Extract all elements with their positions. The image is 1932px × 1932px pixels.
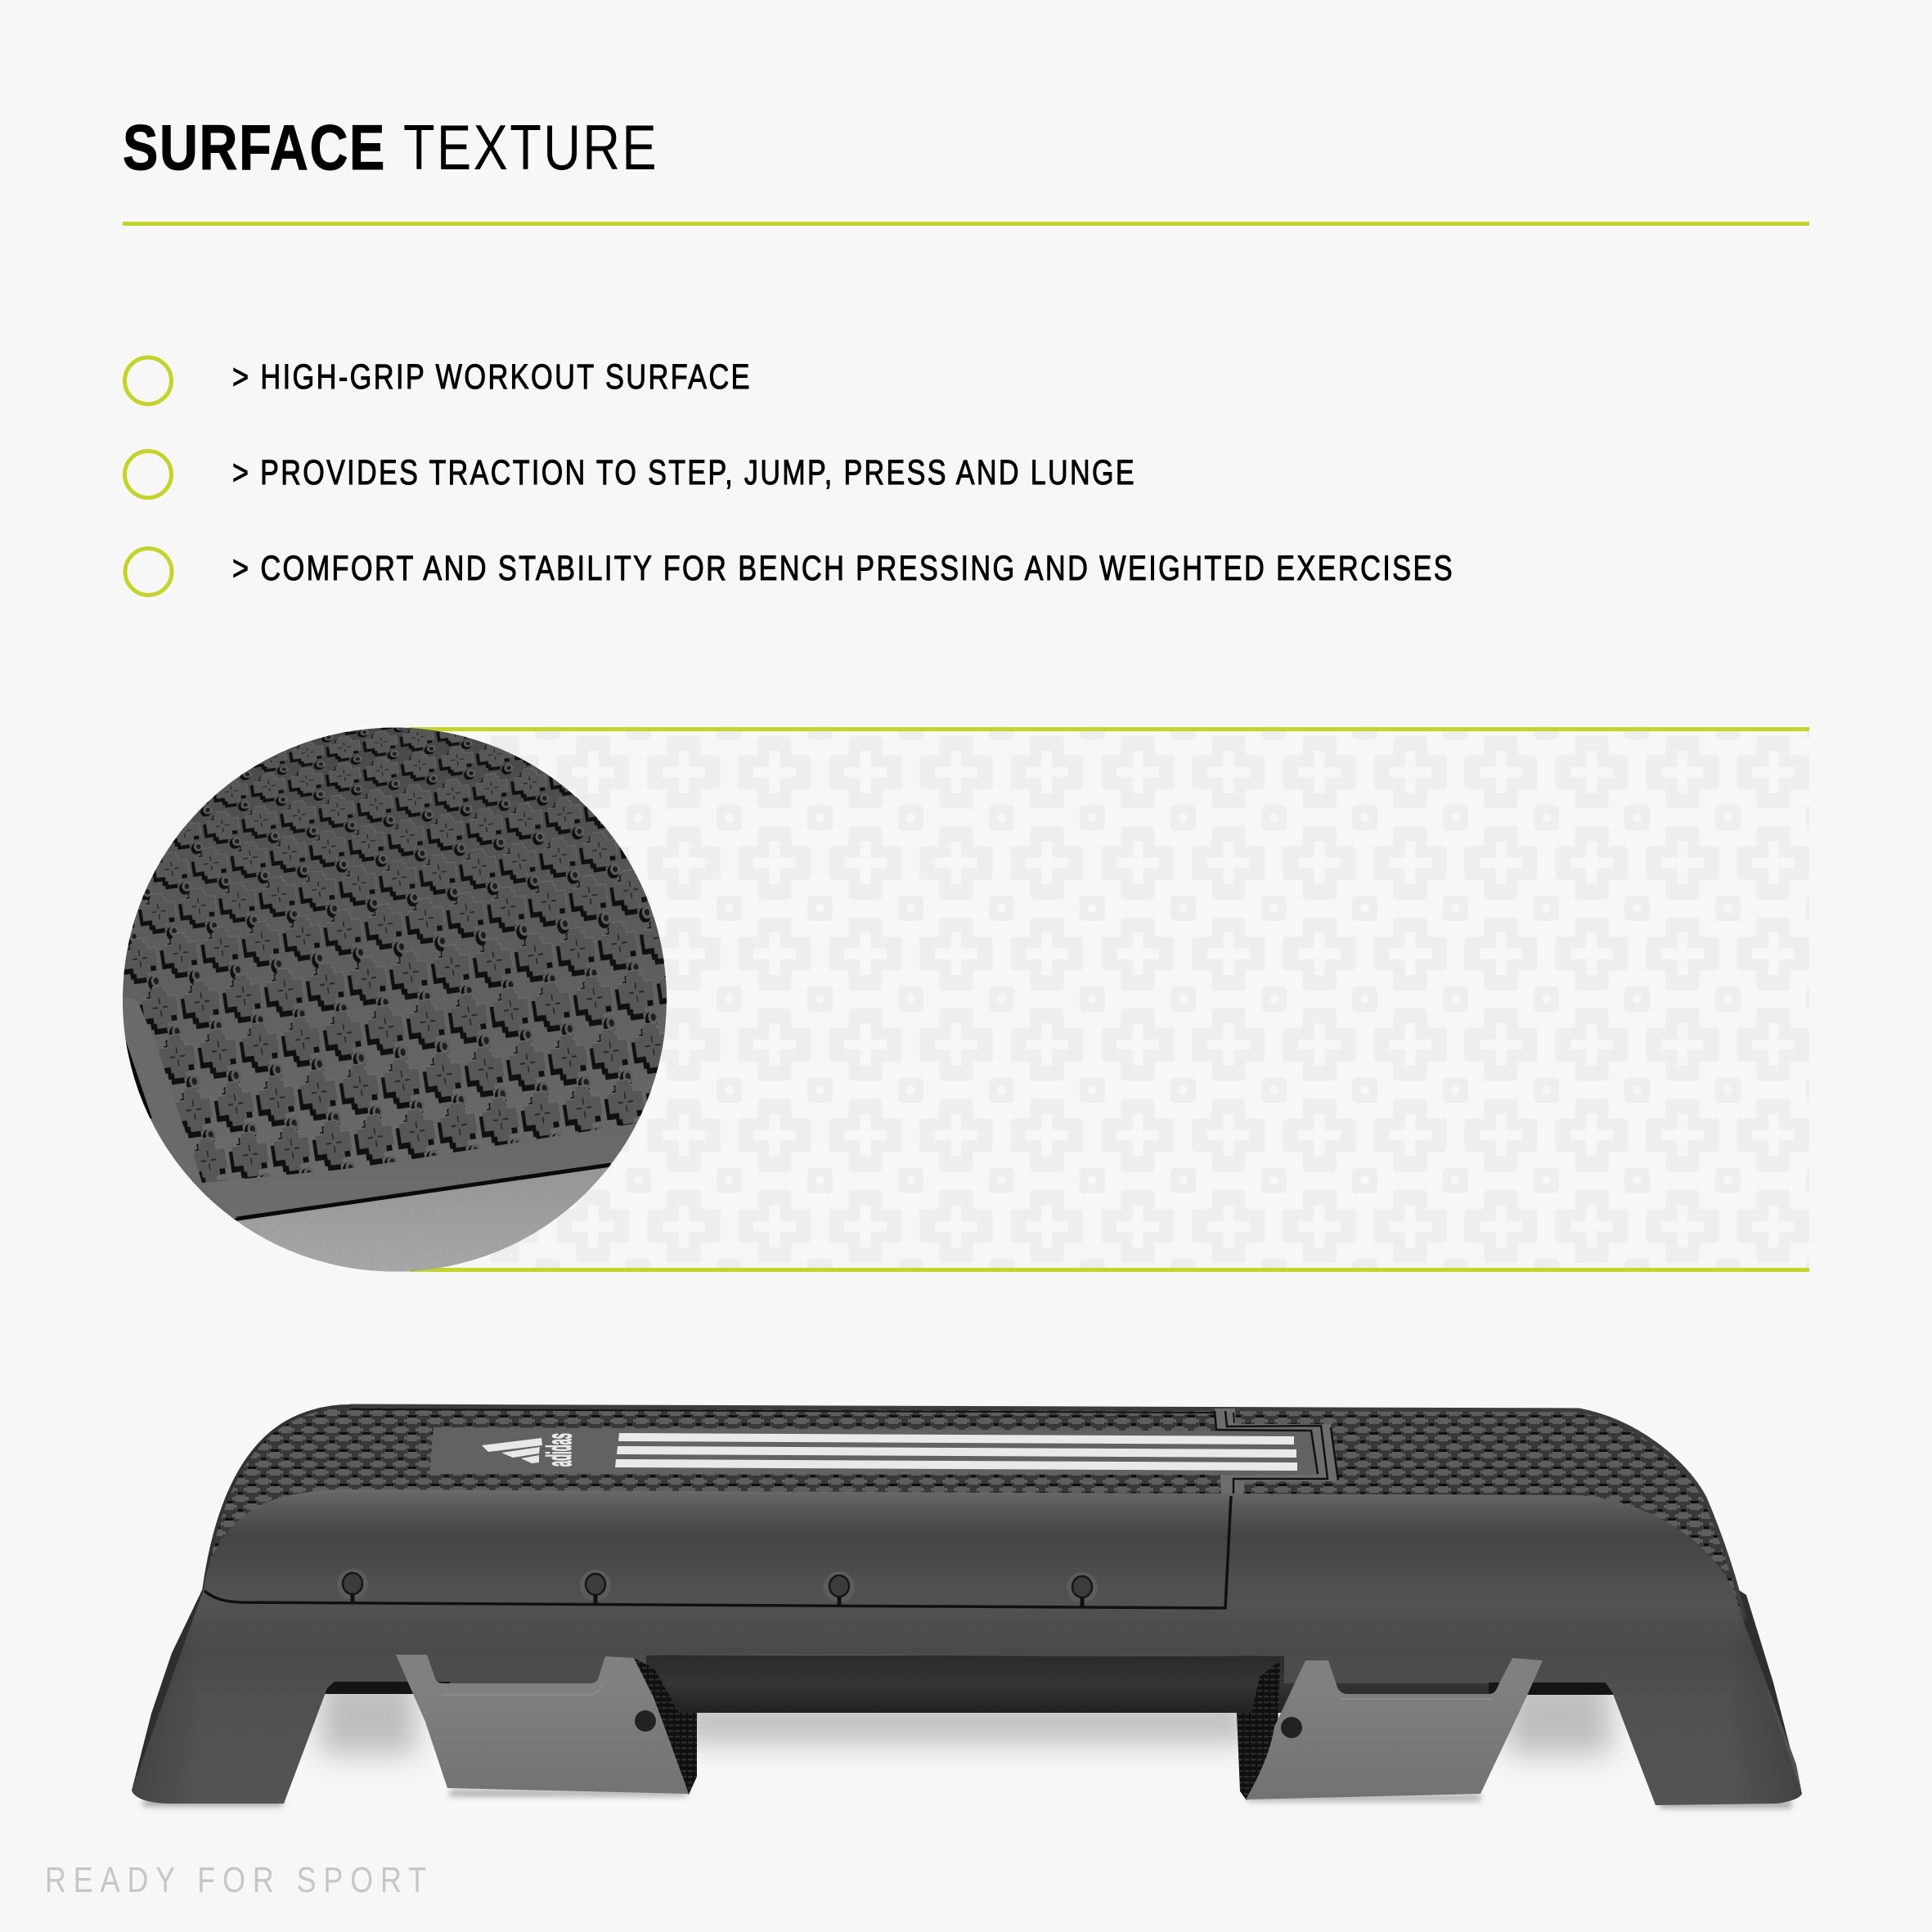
title — [123, 111, 658, 183]
floor below the step — [237, 1163, 612, 1271]
knob 4 — [1067, 1572, 1098, 1606]
title underline — [123, 222, 1809, 226]
adidas stripes — [615, 1433, 1297, 1471]
title: SURFACE — [123, 111, 386, 183]
bullet 3 — [125, 548, 1454, 595]
bullet 1: > HIGH-GRIP WORKOUT SURFACE — [232, 357, 752, 397]
right foot ribbed side — [1237, 1660, 1280, 1800]
far side of right leg — [1722, 1579, 1802, 1794]
bullet 2 — [124, 452, 1136, 497]
left foot — [396, 1655, 689, 1794]
right foot — [1246, 1658, 1543, 1799]
product: adjustable step platform: adidas — [540, 1433, 578, 1467]
knob 1 — [337, 1569, 368, 1604]
floor grain — [221, 1161, 679, 1284]
lock knobs — [337, 1569, 1098, 1606]
front body and legs — [132, 1489, 1802, 1805]
top grip surface — [204, 1405, 1745, 1620]
tagline: READY FOR SPORT — [45, 1860, 434, 1900]
panel: texture band with cross pattern — [409, 727, 1809, 1272]
title: TEXTURE — [403, 111, 658, 183]
left edge shadow — [123, 1039, 150, 1119]
bullet 2: > PROVIDES TRACTION TO STEP, JUMP, PRESS AND LUNGE — [232, 453, 1136, 492]
raised border channels — [1215, 1409, 1339, 1499]
logo panel — [429, 1427, 1318, 1475]
product: adjustable step platform — [132, 1405, 1802, 1808]
edge shadow line — [231, 1165, 611, 1220]
notch recess behind left foot — [311, 1652, 646, 1683]
bullet 3: > COMFORT AND STABILITY FOR BENCH PRESSING AND WEIGHTED EXERCISES — [232, 549, 1454, 588]
floor shadows — [143, 1677, 1791, 1808]
knob 3 — [824, 1571, 855, 1606]
feature list — [124, 357, 1454, 595]
circular close-up of grip surface — [123, 728, 667, 1271]
far side of left leg — [132, 1575, 209, 1790]
knob 2 — [580, 1570, 611, 1605]
sliding panel seam — [204, 1496, 1231, 1608]
adidas logo — [482, 1433, 578, 1467]
left bezel — [115, 994, 237, 1223]
left foot ribbed side — [634, 1658, 697, 1795]
notch recess behind right foot — [1284, 1654, 1628, 1683]
bullet 1 — [124, 357, 752, 404]
underside — [384, 1655, 1554, 1713]
rows of raised crosses and dots — [124, 728, 667, 1183]
